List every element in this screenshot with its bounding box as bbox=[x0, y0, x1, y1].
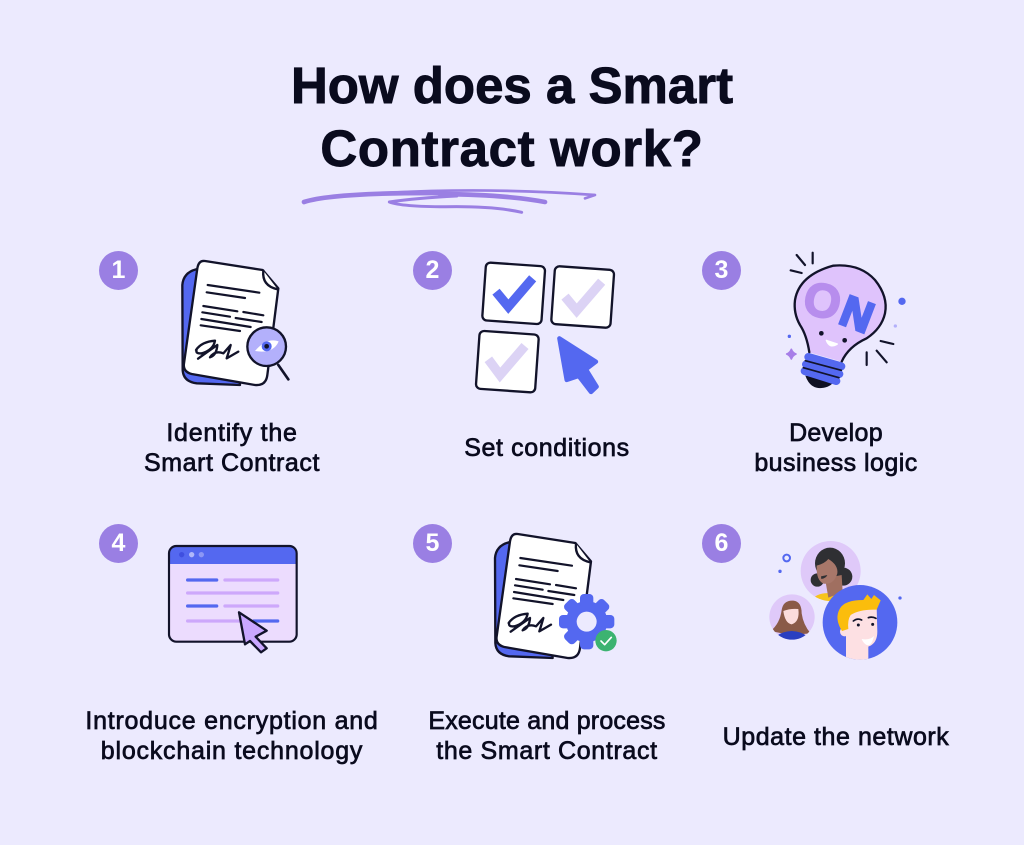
step 1 label bbox=[144, 419, 320, 477]
icon: document with magnifier bbox=[181, 260, 290, 386]
title bbox=[291, 57, 733, 177]
icon: light bulb ON bbox=[786, 252, 906, 388]
step 3 label: business logic bbox=[754, 449, 918, 477]
step 3 number badge bbox=[702, 251, 741, 290]
step 3 number badge: 3 bbox=[715, 256, 728, 284]
step 5 label: the Smart Contract bbox=[436, 737, 658, 765]
title: How does a Smart bbox=[291, 57, 733, 114]
step 6 label: Update the network bbox=[723, 723, 949, 751]
step 4 label: Introduce encryption and bbox=[85, 707, 379, 735]
step 2 number badge bbox=[413, 251, 452, 290]
icon: document with gear and check bbox=[494, 532, 617, 660]
step 4 label: blockchain technology bbox=[101, 737, 363, 765]
step 1 label: Identify the bbox=[166, 419, 298, 447]
step 5 number badge: 5 bbox=[426, 529, 439, 557]
icon: browser window with cursor bbox=[168, 544, 298, 654]
step 1 label: Smart Contract bbox=[144, 449, 320, 477]
step 3 label bbox=[754, 419, 918, 477]
step 3 label: Develop bbox=[789, 419, 883, 447]
title: Contract work? bbox=[320, 120, 704, 177]
icon: checkboxes and cursor bbox=[474, 262, 616, 394]
step 4 number badge: 4 bbox=[112, 529, 125, 557]
step 5 label bbox=[428, 707, 666, 765]
title underline scribble bbox=[302, 189, 596, 214]
icon: three people avatars bbox=[769, 541, 902, 660]
step 5 number badge bbox=[413, 524, 452, 563]
icon: light bulb ON: N bbox=[834, 287, 880, 343]
step 5 label: Execute and process bbox=[428, 707, 666, 735]
step 2 label: Set conditions bbox=[464, 434, 630, 462]
step 4 label bbox=[85, 707, 379, 765]
step 6 number badge: 6 bbox=[715, 529, 728, 557]
step 1 number badge: 1 bbox=[112, 256, 125, 284]
icon: light bulb ON: O bbox=[799, 272, 846, 331]
step 6 number badge bbox=[702, 524, 741, 563]
step 4 number badge bbox=[99, 524, 138, 563]
step 2 number badge: 2 bbox=[426, 256, 439, 284]
step 1 number badge bbox=[99, 251, 138, 290]
